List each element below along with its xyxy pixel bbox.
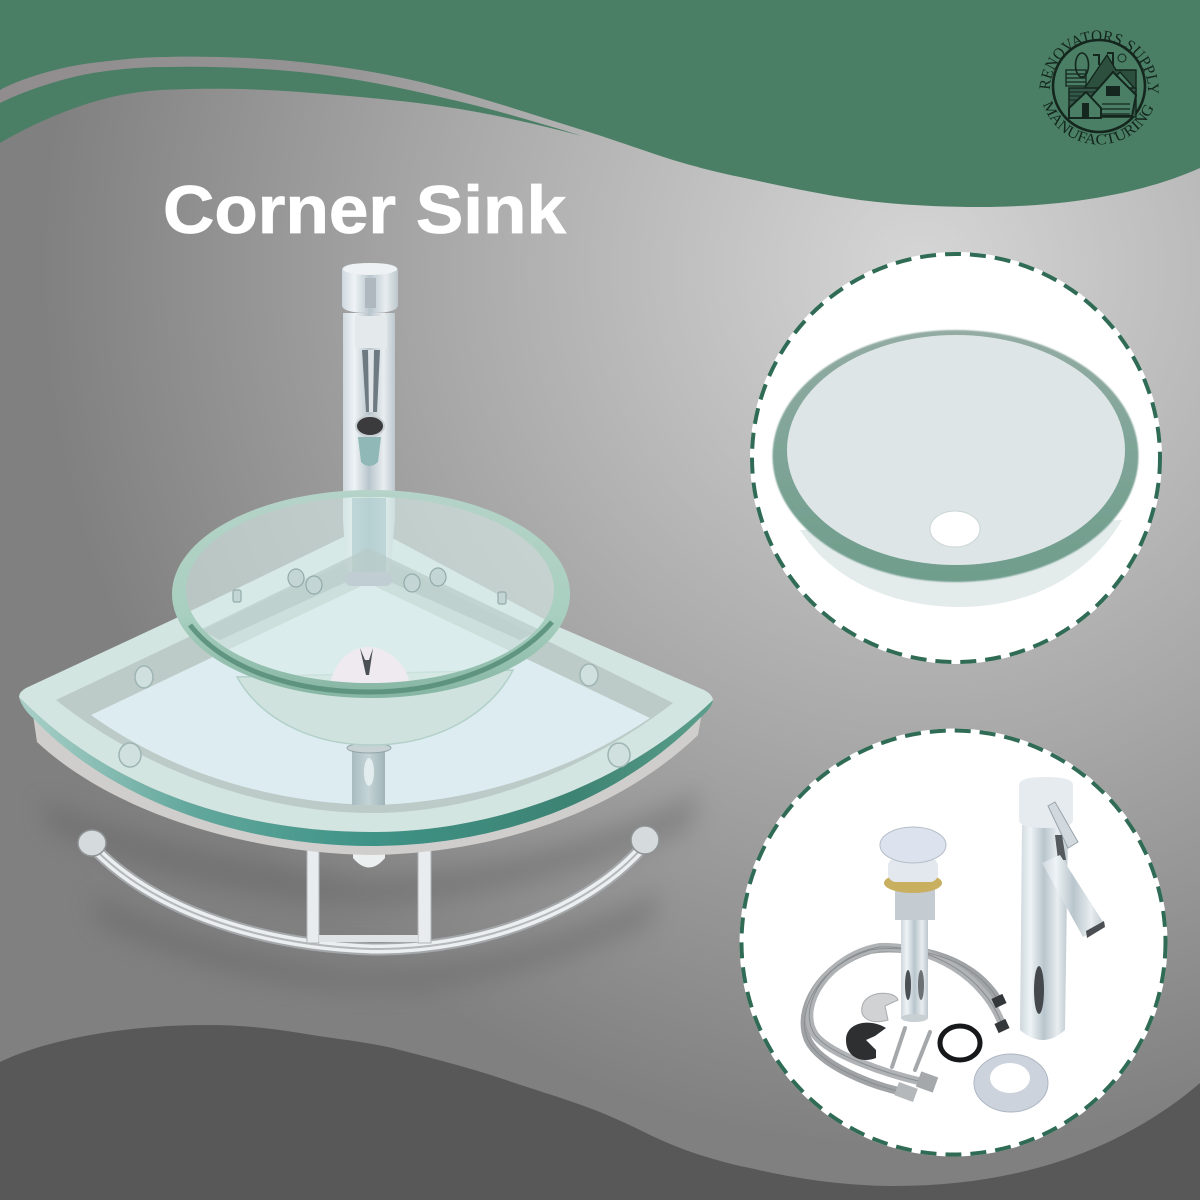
towel bar bbox=[96, 850, 640, 949]
shadows bbox=[40, 790, 700, 990]
bowl drain dome bbox=[330, 647, 410, 688]
drain stub bbox=[353, 846, 385, 868]
lower drain pipe bbox=[347, 743, 391, 805]
dashed border bbox=[742, 730, 1166, 1154]
logo house emblem bbox=[1066, 53, 1136, 118]
detail circle: faucet and drain parts bbox=[740, 728, 1168, 1156]
grey swoosh accent bbox=[0, 55, 592, 136]
faucet seen through water bbox=[352, 498, 386, 575]
bowl interior bbox=[178, 492, 562, 692]
black o-ring bbox=[940, 1026, 980, 1060]
shelf frame band bbox=[56, 552, 673, 813]
logo upper text: RENOVATORS SUPPLY bbox=[1039, 30, 1159, 94]
bowl rim bbox=[772, 330, 1138, 582]
faucet cap detail bbox=[365, 278, 376, 308]
top green wave bbox=[0, 0, 1200, 207]
bowl rim dark front edge bbox=[190, 622, 552, 692]
support band under glass bbox=[33, 712, 702, 855]
silver mounting plate bbox=[862, 993, 898, 1022]
shelf glass top bbox=[19, 525, 713, 832]
circle backdrop bbox=[740, 728, 1168, 1156]
circle backdrop bbox=[750, 252, 1162, 664]
faucet cap bbox=[342, 263, 398, 313]
green strip under swoosh bbox=[0, 67, 582, 143]
logo: Renovators Supply Manufacturing bbox=[1039, 30, 1159, 145]
bowl underside bbox=[800, 520, 1122, 607]
shelf mounting bolts bbox=[119, 664, 630, 767]
corner frame seen through the bowl bbox=[200, 548, 540, 640]
bowl underside bbox=[237, 670, 513, 745]
bowl rim bbox=[172, 490, 570, 698]
logo lower text: MANUFACTURING bbox=[1042, 100, 1153, 145]
faucet lower teal reflection bbox=[358, 437, 381, 466]
towel bar end balls bbox=[78, 826, 659, 856]
single-lever faucet bbox=[1019, 777, 1105, 1040]
chrome trim ring bbox=[974, 1054, 1048, 1112]
mounting rods bbox=[892, 1028, 930, 1070]
faucet aerator bbox=[356, 416, 384, 436]
bottom dark wave bbox=[0, 1025, 1200, 1200]
detail circle: glass bowl bbox=[750, 252, 1162, 664]
drain assembly bbox=[880, 827, 946, 1022]
drain hole bbox=[930, 511, 980, 547]
black gasket bbox=[846, 1023, 886, 1060]
title: Corner Sink bbox=[163, 172, 566, 248]
faucet body bbox=[343, 313, 395, 580]
dashed border bbox=[752, 254, 1160, 662]
lower cross bar bbox=[319, 935, 418, 942]
faucet handle reflection bbox=[355, 316, 387, 412]
bowl bolts bbox=[233, 568, 506, 604]
main product: corner sink bbox=[19, 263, 713, 990]
bowl inner surface bbox=[787, 335, 1125, 565]
faucet base flange bbox=[345, 572, 392, 586]
flexible hoses bbox=[805, 947, 1003, 1092]
hose end fittings bbox=[894, 994, 1010, 1102]
shelf glass edge bbox=[19, 697, 713, 846]
shelf inner clear pane bbox=[91, 583, 650, 805]
support legs bbox=[307, 848, 431, 943]
